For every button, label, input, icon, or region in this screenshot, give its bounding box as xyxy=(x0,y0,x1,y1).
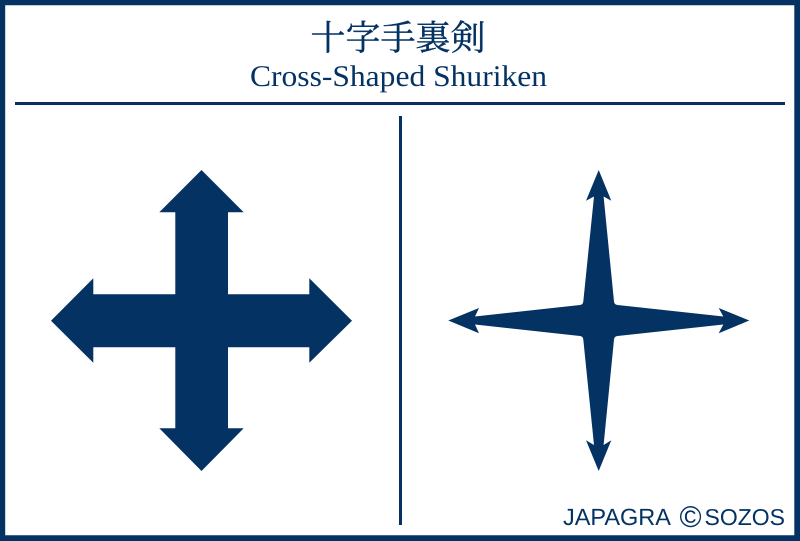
title: Japanese: 十字手裏剣 xyxy=(310,19,486,58)
copyright credit: JAPAGRA xyxy=(563,504,671,530)
center divider xyxy=(399,116,402,525)
copyright credit: SOZOS xyxy=(704,504,785,530)
header rule xyxy=(15,102,785,105)
right shuriken: slender four-point star xyxy=(448,170,749,471)
title: English: Cross-Shaped Shuriken xyxy=(250,60,547,93)
copyright credit xyxy=(563,501,785,534)
left shuriken: wide cross arrow xyxy=(51,170,352,471)
copyright credit: © xyxy=(680,501,702,534)
